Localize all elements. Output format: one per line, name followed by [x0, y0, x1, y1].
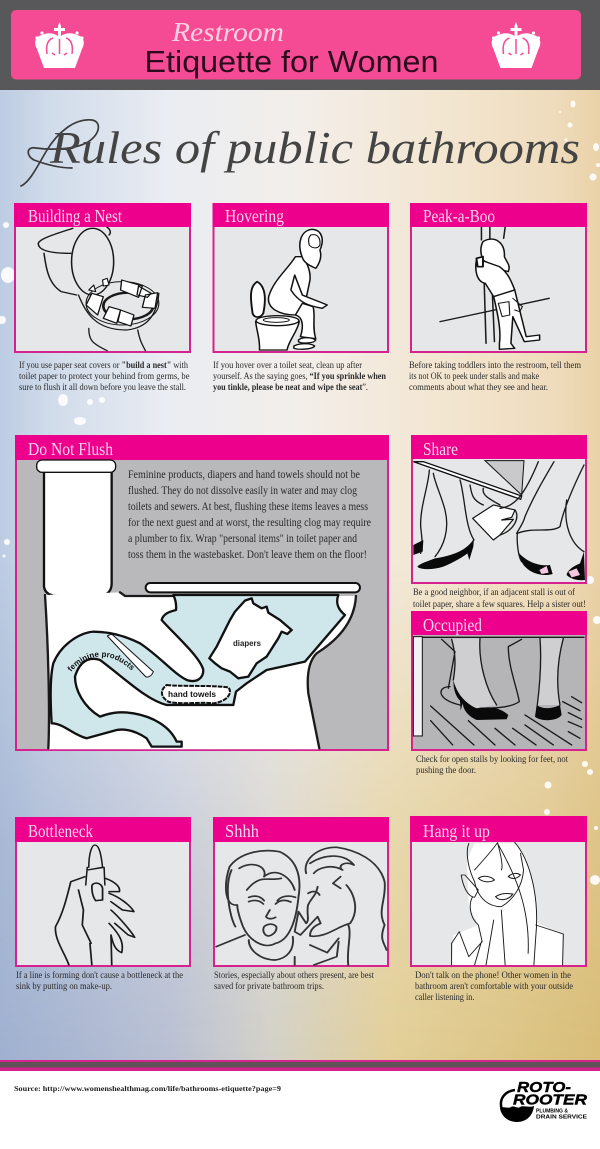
caption: Before taking toddlers into the restroom, tell them	[409, 360, 581, 371]
caption	[214, 970, 374, 992]
caption	[409, 360, 581, 393]
source line: Source: http://www.womenshealthmag.com/life/bathrooms-etiquette?page=9	[14, 1085, 282, 1093]
caption	[416, 754, 568, 776]
body text: a plumber to fix. Wrap "personal items" in toilet paper and	[128, 533, 357, 545]
caption: If you use paper seat covers or "build a nest" with	[19, 360, 188, 371]
caption	[413, 587, 586, 610]
logo: Roto-Rooter: ROTO-	[517, 1079, 571, 1096]
body text: flushed. They do not dissolve easily in water and may clog	[128, 485, 357, 497]
illustration: toddler peeking	[440, 227, 549, 349]
body text: toilets and sewers. At best, flushing these items leaves a mess	[128, 501, 368, 513]
header script word: Restroom	[171, 17, 284, 47]
label: hand towels: hand towels	[168, 689, 216, 699]
main title: Rules of public bathrooms	[49, 123, 580, 173]
logo: Roto-Rooter: DRAIN SERVICE	[536, 1114, 588, 1120]
heading: Share	[423, 439, 458, 459]
caption: Check for open stalls by looking for feet, not	[416, 754, 568, 765]
body text	[128, 469, 371, 561]
body text: Feminine products, diapers and hand towels should not be	[128, 469, 360, 481]
seat	[146, 583, 360, 592]
logo: Roto-Rooter	[500, 1079, 588, 1122]
illustration: passing paper under stall	[413, 461, 585, 580]
caption: yourself. As the saying goes, “If you sprinkle when	[213, 371, 387, 382]
panel: Share	[411, 435, 587, 610]
body text: for the next guest and at worst, the resulting clog may require	[128, 517, 371, 529]
main title	[21, 120, 580, 186]
heading: Do Not Flush	[28, 439, 113, 459]
footer bar	[0, 1060, 600, 1071]
heading: Occupied	[423, 615, 482, 635]
panel: Hovering	[212, 203, 389, 393]
caption: Be a good neighbor, if an adjacent stall is out of	[413, 587, 576, 598]
caption: sink by putting on make-up.	[16, 981, 112, 992]
heading: Peak-a-Boo	[423, 206, 495, 226]
heading: Hang it up	[423, 821, 490, 841]
caption: If a line is forming don't cause a bottleneck at the	[16, 970, 183, 981]
panel: Bottleneck	[15, 817, 191, 992]
hand towels	[162, 685, 230, 703]
illustration: woman on the phone	[452, 842, 563, 965]
icon: crown left	[35, 22, 84, 68]
logo: Roto-Rooter: ROOTER	[513, 1092, 587, 1108]
header bar	[0, 0, 600, 90]
caption: bathroom aren't comfortable with your outside	[415, 981, 573, 992]
illustration: hand with lipstick	[55, 845, 135, 965]
water	[51, 595, 345, 747]
caption	[213, 360, 387, 393]
caption: sure to flush it all down before you leave the stall.	[19, 382, 186, 393]
bowl body	[45, 592, 356, 749]
caption	[415, 970, 573, 1003]
panel: Do Not Flush	[15, 435, 389, 751]
panel: Hang it up	[410, 816, 587, 1003]
heading: Bottleneck	[28, 821, 93, 841]
illustration: feet under stall door	[413, 637, 584, 745]
panel: Occupied	[411, 611, 587, 776]
icon: crown right	[492, 22, 540, 68]
illustration: toilet with paper nest	[38, 227, 159, 351]
caption: toilet paper to protect your behind from germs, be	[19, 371, 190, 382]
caption: caller listening in.	[415, 992, 474, 1003]
caption	[19, 360, 190, 393]
illustration: two women whispering	[216, 847, 387, 965]
logo: Roto-Rooter: PLUMBING &	[536, 1108, 568, 1114]
panel: Peak-a-Boo	[409, 203, 587, 393]
caption: saved for private bathroom trips.	[214, 981, 324, 992]
tank	[44, 472, 112, 596]
illustration: woman hovering over toilet	[251, 229, 327, 350]
diapers	[209, 598, 292, 678]
caption: comments about what they see and hear.	[409, 382, 548, 393]
heading: Building a Nest	[28, 206, 122, 226]
caption: you tinkle, please be neat and wipe the seat”.	[213, 382, 368, 393]
panel: Shhh	[213, 817, 389, 992]
caption	[16, 970, 183, 992]
header title: Etiquette for Women	[144, 44, 438, 79]
caption: If you hover over a toilet seat, clean up after	[213, 360, 363, 371]
panel: Building a Nest	[14, 203, 191, 393]
caption: Don't talk on the phone! Other women in the	[415, 970, 571, 981]
label: feminine products: feminine products	[68, 652, 134, 672]
heading: Hovering	[225, 206, 284, 226]
label: diapers: diapers	[233, 638, 261, 648]
caption: its not OK to peek under stalls and make	[409, 371, 539, 382]
feminine product	[107, 634, 153, 677]
caption: pushing the door.	[416, 765, 476, 776]
heading: Shhh	[225, 821, 259, 841]
illustration: toilet cross-section	[37, 460, 360, 749]
caption: Stories, especially about others present, are best	[214, 970, 374, 981]
body text: toss them in the wastebasket. Don't leave them on the floor!	[128, 549, 367, 561]
